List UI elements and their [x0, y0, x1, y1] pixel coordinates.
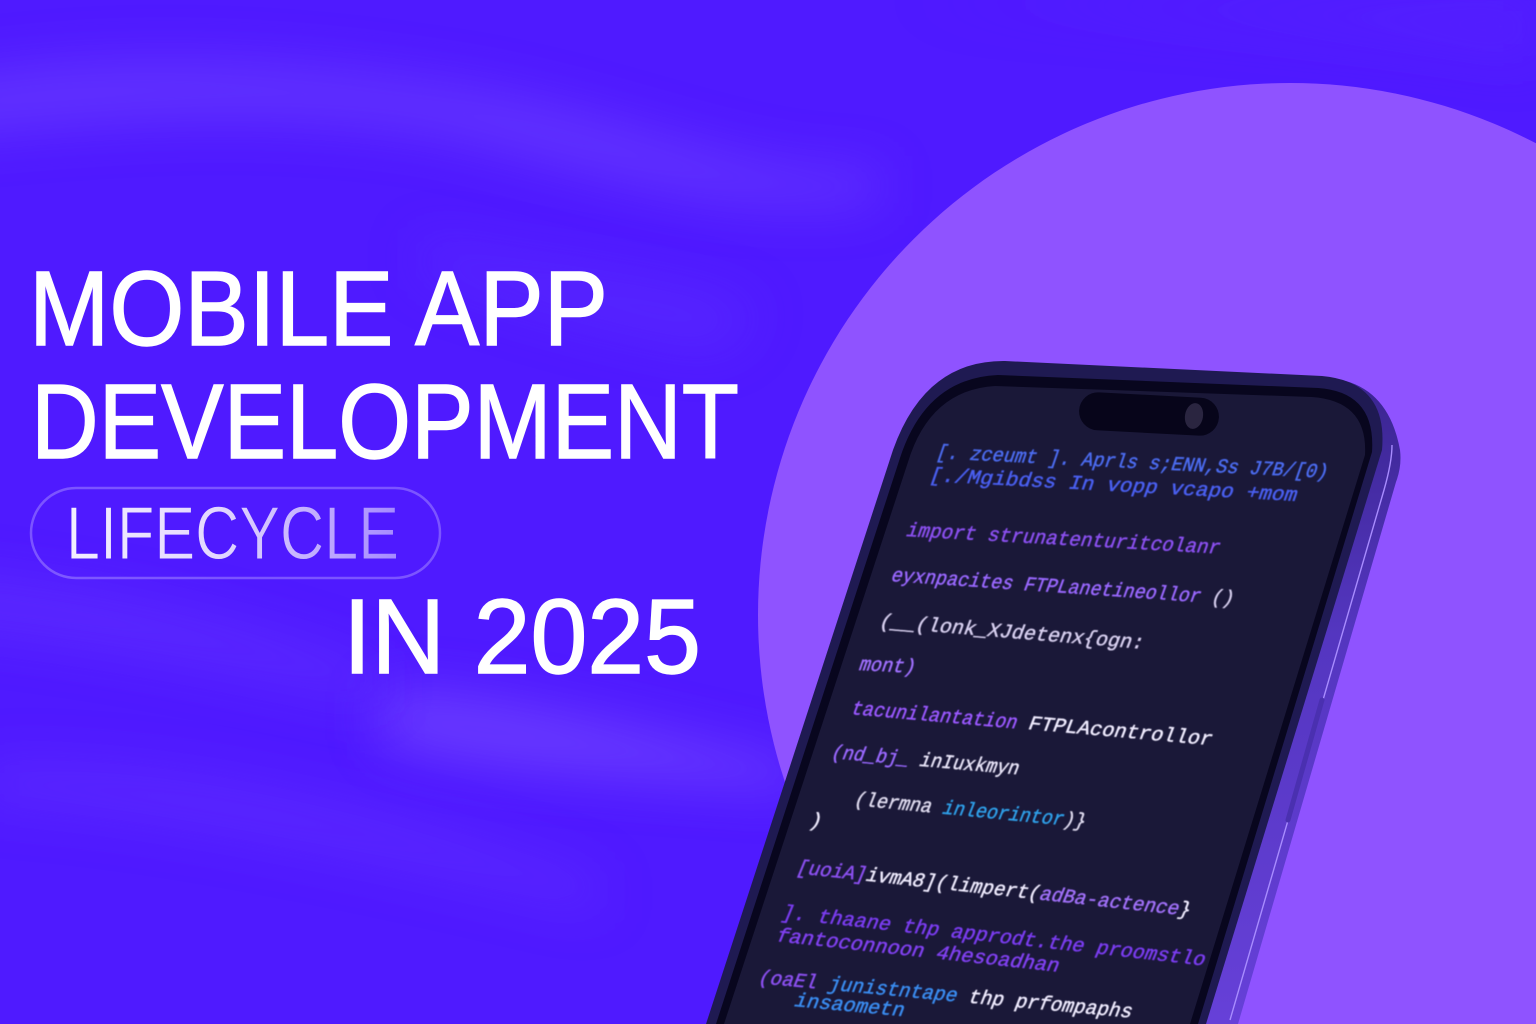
code line 7: tacunilantation	[847, 699, 1021, 735]
lifecycle pill: LIFECYCLE	[66, 491, 399, 575]
code line 9: (lermna inleorintor)}	[850, 790, 1090, 834]
phone	[706, 361, 1400, 1024]
code line 5: (__(lonk_XJdetenx{ogn:	[875, 612, 1148, 655]
code line 1: [. zceumt ]. Aprls s;ENN,Ss J7B/[0)	[933, 443, 1332, 485]
code line 14: (oaEl junistntape thp prfompaphs	[754, 968, 1136, 1024]
code line 4: eyxnpacites FTPLanetineollor ()	[888, 566, 1238, 611]
phone front frame	[706, 361, 1382, 1024]
title: mobile app development	[29, 250, 739, 481]
code line 7: FTPLAcontrollor	[1024, 714, 1216, 752]
side highlight	[1230, 445, 1392, 1020]
code line 7	[847, 699, 1216, 752]
phone side edge	[1180, 378, 1400, 1024]
volume button	[1288, 700, 1322, 820]
title: mobile app development: MOBILE APP	[29, 250, 608, 368]
title: mobile app development: DEVELOPMENT	[31, 363, 739, 481]
screen code	[754, 443, 1332, 1024]
code line 8: (nd_bj_ inIuxkmyn	[827, 743, 1023, 781]
code line 12: ]. thaane thp approdt.the proomstlo	[777, 903, 1210, 972]
code line 13: fantoconnoon 4hesoadhan	[772, 926, 1064, 978]
code line 2: [./Mgibdss In vopp vcapo +mom	[926, 466, 1301, 508]
black bezel	[716, 375, 1372, 1024]
code line 10: )	[805, 811, 826, 834]
screen	[724, 386, 1365, 1024]
code line 3: import strunatenturitcolanr	[903, 521, 1224, 560]
title: in 2025: IN 2025	[343, 578, 701, 696]
code line 15: insaometn	[790, 991, 908, 1023]
code line 6: mont)	[856, 655, 919, 680]
code line 11: [uoiA]ivmA8](limpert(adBa-actence}	[792, 858, 1195, 922]
large purple circle	[758, 83, 1536, 1024]
dynamic island	[1078, 391, 1220, 437]
